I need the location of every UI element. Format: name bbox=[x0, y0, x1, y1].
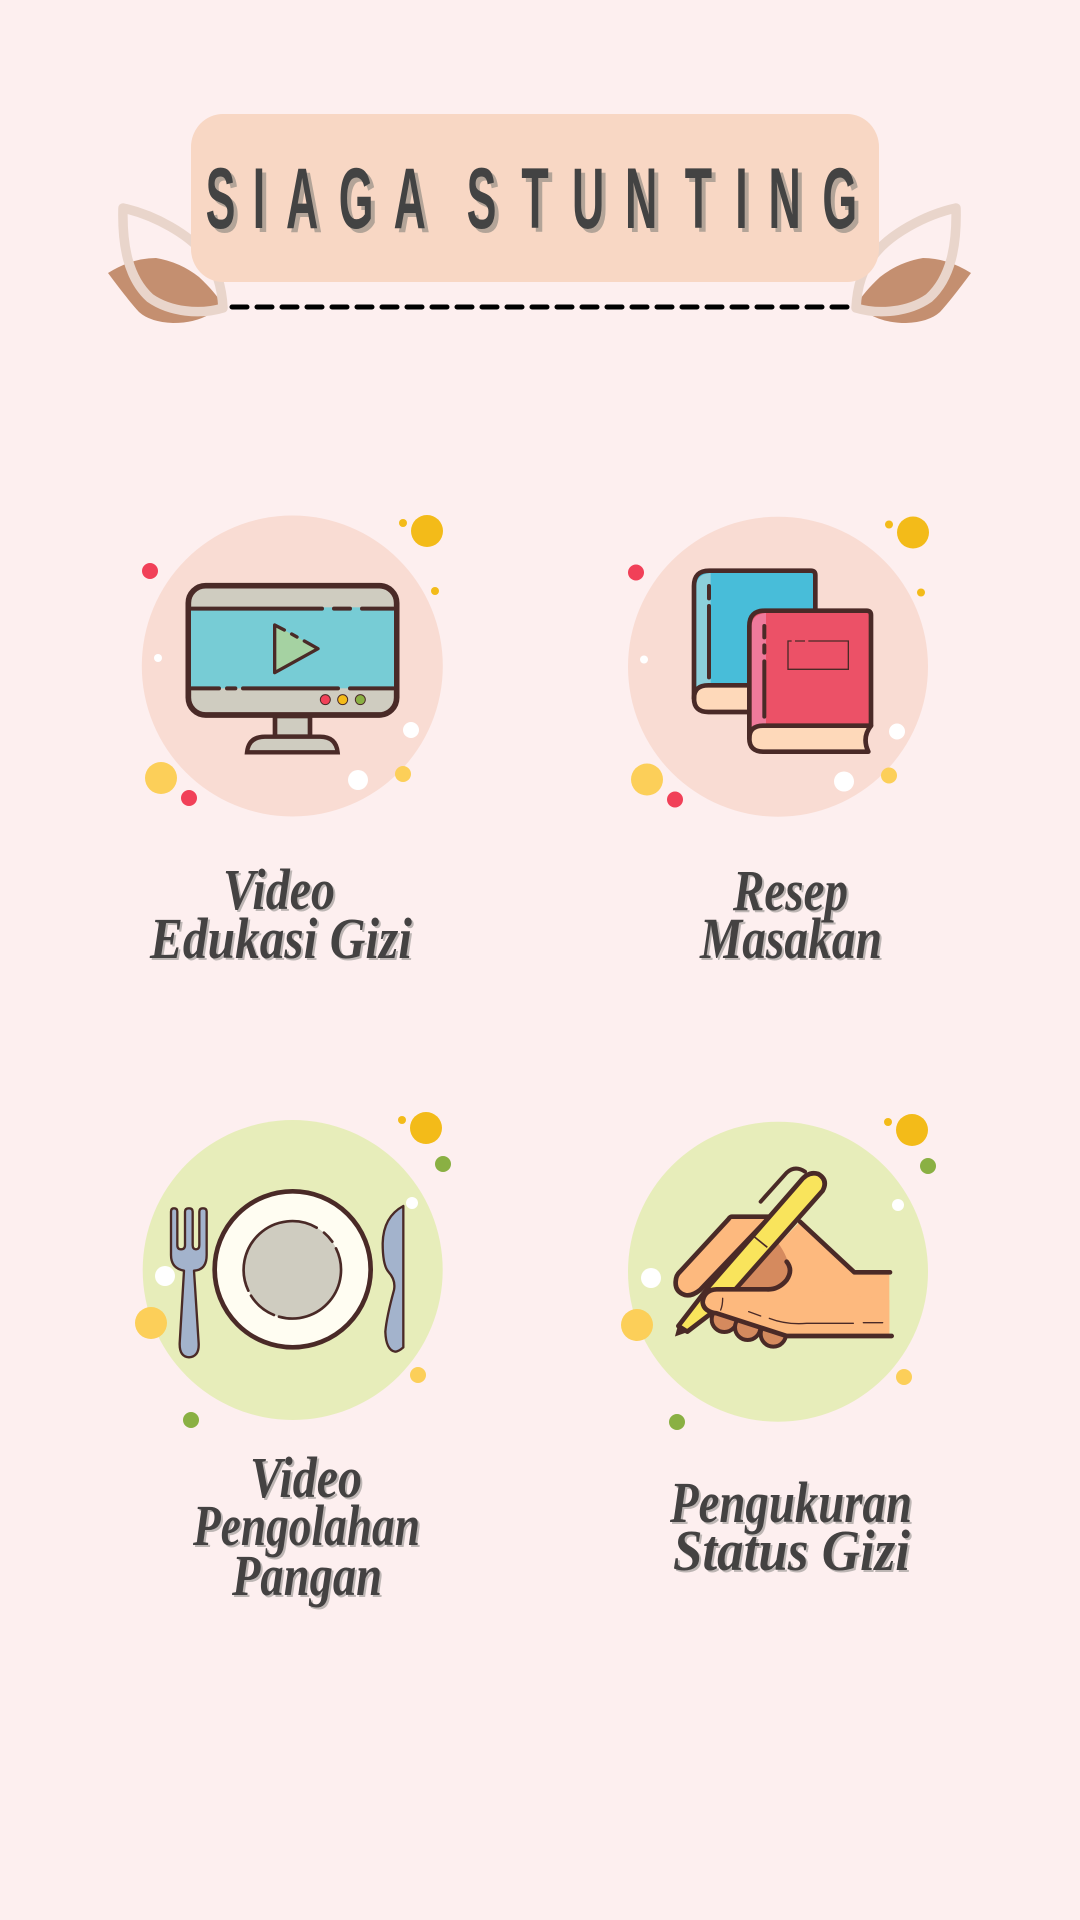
title: SIAGA STUNTING bbox=[210, 154, 861, 251]
title panel bbox=[191, 114, 879, 282]
left leaf decoration bbox=[108, 208, 223, 323]
plate bbox=[215, 1191, 371, 1347]
icon: monitor with play button bbox=[188, 586, 397, 752]
dashed line under title bbox=[232, 304, 852, 310]
knife bbox=[383, 1206, 403, 1352]
confetti dots bbox=[142, 515, 443, 806]
fork bbox=[171, 1208, 207, 1357]
icon: plate, fork and knife bbox=[171, 1191, 403, 1357]
panel: video edukasi gizi bbox=[142, 515, 443, 971]
background circle bbox=[143, 1120, 443, 1420]
label: Masakan bbox=[699, 906, 882, 971]
palm bbox=[717, 1222, 889, 1336]
confetti dots bbox=[621, 1114, 936, 1430]
label: Pengolahan bbox=[192, 1493, 420, 1558]
white dots over icon bbox=[155, 1197, 418, 1286]
pen bbox=[678, 1173, 825, 1332]
panel: video pengolahan pangan bbox=[135, 1112, 451, 1608]
confetti dots bbox=[628, 516, 929, 808]
background circle bbox=[628, 517, 928, 817]
label: Video bbox=[250, 1445, 362, 1510]
label bbox=[669, 1470, 912, 1583]
background circle bbox=[142, 516, 443, 816]
panel: resep masakan bbox=[628, 516, 929, 971]
label: Edukasi Gizi bbox=[149, 906, 412, 971]
label bbox=[149, 857, 412, 971]
background circle bbox=[628, 1122, 928, 1422]
label bbox=[192, 1445, 420, 1608]
title: SIAGA STUNTING bbox=[206, 150, 857, 247]
label: Resep bbox=[732, 858, 848, 923]
label: Pengukuran bbox=[669, 1470, 912, 1535]
panel: pengukuran status gizi bbox=[621, 1114, 936, 1583]
index finger bbox=[676, 1217, 770, 1295]
label: Pangan bbox=[231, 1543, 382, 1608]
right leaf decoration bbox=[856, 208, 971, 323]
label bbox=[699, 858, 882, 971]
palm shadow bbox=[738, 1243, 789, 1289]
icon: two books bbox=[694, 571, 871, 752]
label: Video bbox=[223, 857, 335, 922]
label: Status Gizi bbox=[673, 1518, 910, 1583]
header banner bbox=[108, 114, 971, 323]
knuckles bbox=[712, 1307, 786, 1347]
thumb bbox=[703, 1287, 889, 1336]
pen clip bbox=[761, 1169, 805, 1202]
icon: hand writing with pen bbox=[676, 1169, 892, 1347]
confetti dots bbox=[135, 1112, 451, 1428]
